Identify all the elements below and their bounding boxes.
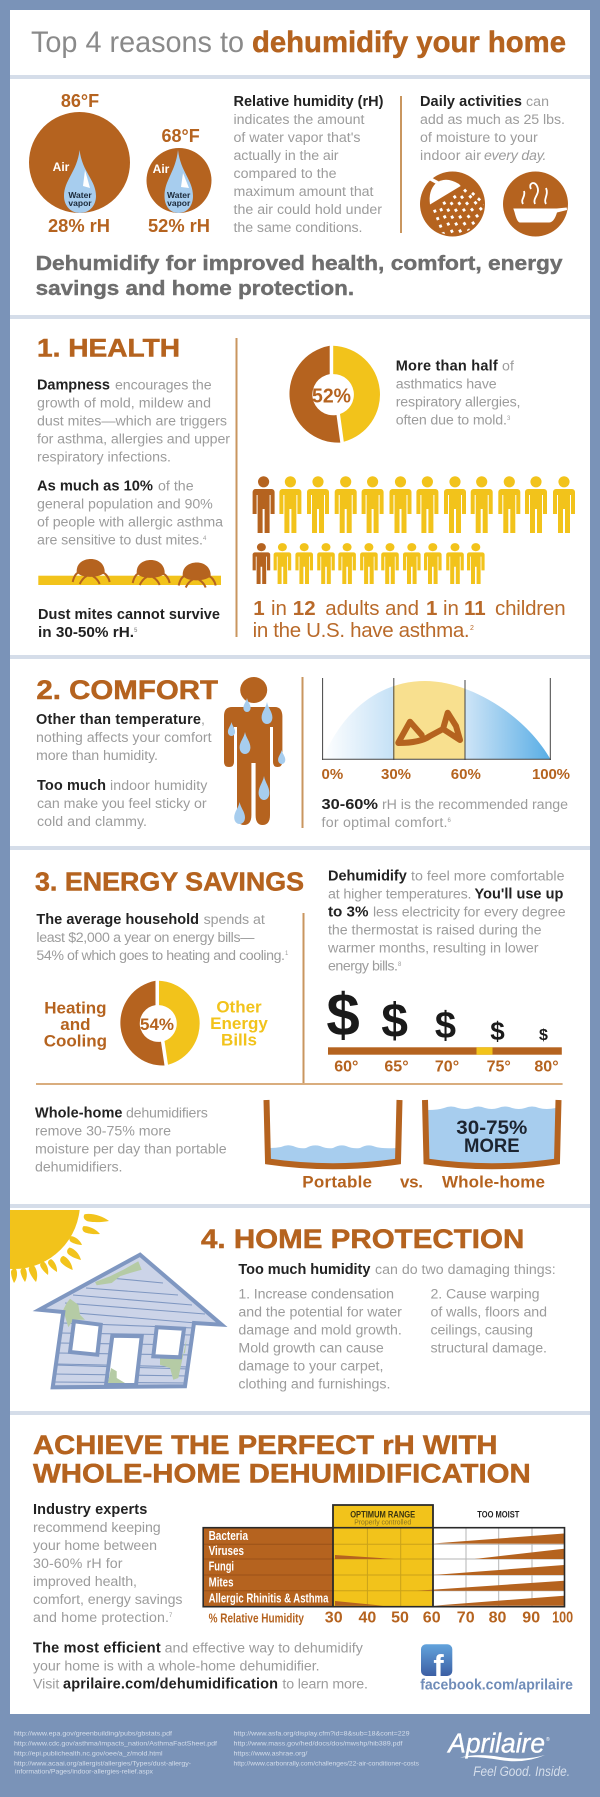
- text: recommended comfort range: 6: [448, 818, 452, 824]
- text: industry experts: improved health,: [33, 1574, 137, 1590]
- text: asthma statistic: 1: [253, 597, 265, 620]
- text: other than temperature: ,: [201, 712, 205, 728]
- donut chart: 54 percent: Bills: [221, 1031, 257, 1050]
- chart: humidity comfort curve: 30%: [381, 766, 411, 783]
- heading: 1. health: 1. HEALTH: [37, 335, 180, 363]
- text: whole-home dehumidifiers: Whole-home: [35, 1106, 122, 1122]
- text: sensitivity to dust mites: of the: [158, 479, 194, 495]
- chart: optimum humidity range table: Mites: [209, 1575, 234, 1590]
- text: damage item 2: 2. Cause warping: [430, 1286, 540, 1302]
- chart: optimum humidity range table: Viruses: [209, 1543, 244, 1558]
- text: other than temperature: more than humidity.: [36, 748, 158, 764]
- text: whole-home dehumidifiers: dehumidifiers.: [35, 1160, 122, 1176]
- text: dehumidify for electricity savings: You'll use up: [474, 887, 563, 903]
- text: asthma statistic: in: [271, 597, 287, 620]
- text: asthma statistic: 2: [470, 625, 474, 632]
- text: industry experts: comfort, energy savings: [33, 1592, 182, 1608]
- text: damage item 1: damage and mold growth.: [238, 1322, 402, 1338]
- text: damage item 2: of walls, floors and: [430, 1304, 547, 1320]
- chart: optimum humidity range table: 100: [552, 1610, 573, 1627]
- text: daily activities: [420, 94, 565, 164]
- text: most efficient call to action: aprilaire.com/dehumidification: [63, 1677, 278, 1693]
- illustration: sun: [10, 1210, 109, 1283]
- text: dehumidify for electricity savings: 8: [398, 962, 402, 968]
- text: sensitivity to dust mites: are sensitive to dust mites.: [37, 533, 203, 549]
- text: dehumidify for electricity savings: [327, 869, 566, 975]
- text: dampness: Dampness: [37, 377, 110, 393]
- icon: sweating person: [224, 677, 285, 825]
- text: recommended comfort range: rH is the recommended range: [382, 797, 568, 813]
- text: industry experts: your home between: [33, 1538, 157, 1554]
- illustration: dust mites: [38, 559, 221, 588]
- chart: humidity comfort curve: 100%: [532, 766, 570, 783]
- text: dust mites cannot survive: Dust mites cannot survive: [38, 607, 220, 623]
- text: industry experts: 30-60% rH for: [33, 1556, 123, 1572]
- text: damage item 1: clothing and furnishings.: [238, 1376, 390, 1392]
- title: Top 4 reasons to: [31, 26, 244, 59]
- text: average household: The average household: [36, 912, 199, 928]
- chart: cost by thermostat temperature: $: [490, 1016, 505, 1046]
- footnotes: right column: [234, 1731, 420, 1768]
- donut chart: 54 percent: 54%: [140, 1015, 174, 1034]
- text: average household: spends at: [204, 912, 265, 928]
- text: relative humidity definition: of water vapor that's: [234, 130, 360, 146]
- text: asthma statistic: 12: [293, 597, 316, 620]
- illustration: portable vs whole-home tanks: 30-75%: [456, 1118, 527, 1139]
- text: dampness: [37, 377, 230, 465]
- diagram: 68F air and water vapor: [146, 126, 212, 236]
- text: daily activities: Daily activities: [420, 94, 522, 110]
- diagram: 86F air and water vapor: 86°F: [61, 91, 99, 111]
- footnotes: right column: http://www.mass.gov/hed/docs/dos/mwshp/hib389.pdf: [234, 1741, 403, 1748]
- illustration: portable vs whole-home tanks: Portable: [302, 1172, 372, 1191]
- chart: optimum humidity range table: 50: [391, 1610, 409, 1627]
- text: damage item 2: [430, 1286, 547, 1356]
- text: other than temperature: Other than temperature: [36, 712, 201, 728]
- text: most efficient call to action: The most efficient: [33, 1641, 161, 1657]
- heading: achieve the perfect rH: WHOLE-HOME DEHUMIDIFICATION: [33, 1459, 531, 1489]
- text: dehumidify for electricity savings: at higher temperatures.: [328, 887, 472, 903]
- illustration: damaged house: [39, 1255, 222, 1387]
- text: dehumidify for electricity savings: less electricity for every degree: [373, 905, 566, 921]
- logo: Aprilaire: Feel Good. Inside.: [473, 1764, 570, 1779]
- text: whole-home dehumidifiers: [35, 1106, 227, 1176]
- text: daily activities: indoor air: [420, 148, 481, 164]
- chart: optimum humidity range table: % Relative Humidity: [209, 1611, 305, 1626]
- text: average household: 54% of which goes to heating and cooling.: [36, 948, 285, 964]
- footnotes: left column: [14, 1731, 217, 1775]
- chart: optimum humidity range table: 80: [489, 1610, 506, 1627]
- diagram: 68F air and water vapor: 68°F: [161, 126, 200, 146]
- diagram: 86F air and water vapor: Air: [53, 160, 70, 174]
- text: damage item 1: damage to your carpet,: [238, 1358, 383, 1374]
- chart: optimum humidity range table: 70: [457, 1610, 475, 1627]
- chart: cost by thermostat temperature: $: [539, 1027, 548, 1044]
- text: industry experts: and home protection.: [33, 1610, 169, 1626]
- text: whole-home dehumidifiers: remove 30-75% more: [35, 1124, 171, 1140]
- text: relative humidity definition: [234, 94, 384, 236]
- text: dampness: respiratory infections.: [37, 449, 171, 465]
- donut chart: 54 percent: Heating: [44, 998, 107, 1017]
- footnotes: right column: http://www.asfa.org/display.cfm?id=8&sub=18&cont=229: [234, 1731, 410, 1738]
- chart: optimum humidity range table: Properly controlled: [354, 1520, 411, 1526]
- footnotes: left column: information/Pages/indoor-allergies-relief.aspx: [15, 1768, 154, 1775]
- donut chart: 54 percent: Other: [216, 998, 262, 1017]
- text: recommended comfort range: for optimal comfort.: [322, 815, 448, 831]
- chart: cost by thermostat temperature: 65°: [384, 1059, 409, 1076]
- logo: Aprilaire: Aprilaire: [446, 1727, 545, 1758]
- chart: cost by thermostat temperature: $: [381, 995, 408, 1048]
- heading: achieve the perfect rH: ACHIEVE THE PERFECT rH WITH: [33, 1430, 498, 1460]
- donut chart: 52 percent: [289, 346, 380, 443]
- chart: optimum humidity range table: Allergic Rhinitis & Asthma: [209, 1591, 329, 1606]
- text: asthma statistic: adults and: [325, 597, 419, 620]
- text: average household: least $2,000 a year on energy bills—: [36, 930, 255, 946]
- text: relative humidity definition: maximum amount that: [234, 184, 374, 200]
- text: too much humidity: can make you feel sticky or: [37, 796, 207, 812]
- text: asthma statistic: in: [443, 597, 459, 620]
- chart: optimum humidity range table: TOO MOIST: [477, 1509, 519, 1520]
- logo: Aprilaire: [446, 1727, 570, 1779]
- text: industry experts: Industry experts: [33, 1502, 147, 1518]
- text: sensitivity to dust mites: of people with allergic asthma: [37, 515, 223, 531]
- footnotes: right column: https://www.ashrae.org/: [234, 1751, 308, 1758]
- text: dampness: growth of mold, mildew and: [37, 395, 211, 411]
- footnotes: left column: http://www.cdc.gov/asthma/impacts_nation/AsthmaFactSheet.pdf: [14, 1741, 217, 1748]
- icon: facebook: facebook.com/aprilaire: [420, 1676, 573, 1693]
- text: industry experts: recommend keeping: [33, 1520, 161, 1536]
- text: daily activities: can: [526, 94, 549, 110]
- donut chart: 54 percent: and: [60, 1015, 91, 1034]
- text: more than half of asthmatics: asthmatics have: [396, 377, 497, 393]
- heading: 3. energy savings: 3. ENERGY SAVINGS: [35, 867, 304, 897]
- chart: humidity comfort curve: [322, 678, 570, 783]
- pictogram: 1 in 11 children: [253, 543, 485, 584]
- chart: cost by thermostat temperature: [326, 982, 562, 1076]
- text: daily activities: of moisture to your: [420, 130, 538, 146]
- text: relative humidity definition: actually in the air: [234, 148, 339, 164]
- text: dust mites cannot survive: 5: [134, 628, 138, 634]
- text: most efficient call to action: [33, 1641, 368, 1693]
- donut chart: 52 percent: 52%: [312, 386, 351, 408]
- text: industry experts: [33, 1502, 182, 1626]
- subheading: dehumidify for improved: Dehumidify for improved health, comfort, energy: [36, 253, 564, 275]
- text: sensitivity to dust mites: As much as 10%: [37, 479, 153, 495]
- chart: optimum humidity range table: Fungi: [209, 1559, 234, 1574]
- text: average household: [36, 912, 289, 964]
- text: damage item 1: and the potential for water: [238, 1304, 402, 1320]
- text: dehumidify for electricity savings: warmer months, resulting in lower: [327, 941, 539, 957]
- text: damage item 2: structural damage.: [430, 1340, 547, 1356]
- chart: cost by thermostat temperature: $: [435, 1005, 456, 1047]
- donut chart: 54 percent: Cooling: [44, 1032, 107, 1051]
- donut chart: 54 percent: Energy: [210, 1014, 268, 1033]
- text: damage item 1: Mold growth can cause: [238, 1340, 384, 1356]
- text: too much humidity: indoor humidity: [110, 778, 208, 794]
- diagram: 68F air and water vapor: Water: [167, 190, 191, 200]
- illustration: portable vs whole-home tanks: Whole-home: [442, 1172, 545, 1191]
- text: more than half of asthmatics: often due to mold.: [396, 413, 507, 429]
- chart: optimum humidity range table: OPTIMUM RANGE: [350, 1509, 415, 1520]
- footnotes: left column: http://www.acaai.org/allergist/allergies/Types/dust-allergy-: [14, 1761, 191, 1768]
- footnotes: left column: http://www.epa.gov/greenbuilding/pubs/gbstats.pdf: [14, 1731, 172, 1738]
- pictogram: 1 in 12 adults: [253, 476, 575, 533]
- text: daily activities: add as much as 25 lbs.: [420, 112, 565, 128]
- text: damage item 2: ceilings, causing: [430, 1322, 533, 1338]
- diagram: 68F air and water vapor: Air: [153, 162, 170, 176]
- text: too much humidity intro: [238, 1262, 556, 1278]
- diagram: 68F air and water vapor: vapor: [167, 198, 191, 208]
- subheading: dehumidify for improved: [36, 253, 564, 300]
- text: most efficient call to action: your home is with a whole-home dehumidifier.: [33, 1659, 320, 1675]
- chart: humidity comfort curve: 60%: [451, 766, 481, 783]
- chart: cost by thermostat temperature: 70°: [435, 1059, 459, 1076]
- icon: facebook: f: [433, 1648, 444, 1683]
- icon: steaming pan: [503, 172, 568, 236]
- text: too much humidity intro: can do two damaging things:: [375, 1262, 556, 1278]
- text: relative humidity definition: compared to the: [234, 166, 337, 182]
- text: dehumidify for electricity savings: to feel more comfortable: [411, 869, 565, 885]
- text: too much humidity: cold and clammy.: [37, 814, 147, 830]
- icon: shower: [420, 172, 485, 236]
- text: most efficient call to action: and effective way to dehumidify: [165, 1641, 364, 1657]
- text: more than half of asthmatics: 3: [507, 416, 511, 422]
- donut chart: 54 percent: [44, 981, 268, 1066]
- text: dampness: encourages the: [115, 377, 212, 393]
- chart: optimum humidity range table: 90: [522, 1610, 540, 1627]
- illustration: portable vs whole-home tanks: [266, 1100, 558, 1191]
- diagram: 86F air and water vapor: Water: [68, 190, 92, 200]
- text: industry experts: 7: [169, 1613, 173, 1619]
- text: dehumidify for electricity savings: to 3%: [328, 905, 369, 921]
- text: dehumidify for electricity savings: Dehumidify: [328, 869, 407, 885]
- chart: optimum humidity range table: 30: [325, 1610, 343, 1627]
- text: dampness: dust mites—which are triggers: [37, 413, 227, 429]
- diagram: 86F air and water vapor: vapor: [68, 198, 92, 208]
- text: asthma statistic: 1: [426, 597, 437, 620]
- text: dust mites cannot survive: [38, 607, 220, 641]
- footnotes: left column: http://epi.publichealth.nc.gov/oee/a_z/mold.html: [14, 1751, 163, 1758]
- title: [31, 26, 566, 59]
- text: sensitivity to dust mites: general population and 90%: [37, 497, 213, 513]
- text: asthma statistic: 11: [464, 597, 486, 620]
- icon: facebook: [420, 1644, 573, 1693]
- text: other than temperature: nothing affects your comfort: [36, 730, 212, 746]
- chart: cost by thermostat temperature: 60°: [334, 1059, 358, 1076]
- chart: optimum humidity range table: 40: [359, 1610, 376, 1627]
- text: recommended comfort range: [322, 797, 568, 831]
- text: asthma statistic: [253, 597, 566, 642]
- text: dehumidify for electricity savings: energy bills.: [328, 959, 398, 975]
- text: dehumidify for electricity savings: the thermostat is raised during the: [328, 923, 542, 939]
- text: sensitivity to dust mites: [37, 479, 223, 549]
- text: more than half of asthmatics: More than half: [396, 359, 498, 375]
- illustration: portable vs whole-home tanks: vs.: [400, 1172, 423, 1191]
- chart: optimum humidity range table: 60: [423, 1610, 441, 1627]
- subheading: dehumidify for improved: savings and home protection.: [36, 278, 354, 300]
- text: relative humidity definition: the same conditions.: [234, 220, 362, 236]
- text: too much humidity: Too much: [37, 778, 106, 794]
- text: average household: 1: [285, 951, 289, 957]
- text: daily activities: every day.: [484, 148, 546, 164]
- text: damage item 1: 1. Increase condensation: [238, 1286, 394, 1302]
- heading: 2. comfort: 2. COMFORT: [36, 675, 219, 705]
- text: more than half of asthmatics: respiratory allergies,: [396, 395, 520, 411]
- chart: optimum humidity range table: [203, 1505, 573, 1627]
- footnotes: right column: http://www.carbonrally.com/challenges/22-air-conditioner-costs: [234, 1761, 420, 1768]
- text: whole-home dehumidifiers: moisture per day than portable: [35, 1142, 227, 1158]
- diagram: 86F air and water vapor: 28% rH: [48, 216, 110, 236]
- text: relative humidity definition: Relative humidity (rH): [234, 94, 384, 110]
- logo: Aprilaire: ®: [546, 1736, 550, 1743]
- text: more than half of asthmatics: [396, 359, 520, 429]
- text: whole-home dehumidifiers: dehumidifiers: [126, 1106, 208, 1122]
- chart: humidity comfort curve: 0%: [322, 766, 343, 783]
- text: too much humidity: [37, 778, 208, 830]
- text: more than half of asthmatics: of: [502, 359, 514, 375]
- title: dehumidify your home: [252, 26, 566, 59]
- illustration: portable vs whole-home tanks: MORE: [464, 1136, 520, 1157]
- diagram: 68F air and water vapor: 52% rH: [148, 216, 210, 236]
- text: dampness: for asthma, allergies and upper: [37, 431, 230, 447]
- text: recommended comfort range: 30-60%: [322, 797, 378, 813]
- text: asthma statistic: in the U.S. have asthma.: [253, 619, 470, 642]
- text: damage item 1: [238, 1286, 402, 1392]
- text: asthma statistic: children: [495, 597, 566, 620]
- chart: cost by thermostat temperature: 80°: [534, 1059, 559, 1076]
- text: too much humidity intro: Too much humidity: [238, 1262, 370, 1278]
- text: sensitivity to dust mites: 4: [203, 536, 207, 542]
- chart: optimum humidity range table: Bacteria: [209, 1528, 249, 1543]
- text: relative humidity definition: indicates the amount: [234, 112, 365, 128]
- text: other than temperature: [36, 712, 212, 764]
- heading: 4. home protection: 4. HOME PROTECTION: [201, 1224, 524, 1254]
- chart: cost by thermostat temperature: 75°: [487, 1059, 511, 1076]
- chart: cost by thermostat temperature: $: [326, 982, 360, 1048]
- text: dust mites cannot survive: in 30-50% rH.: [38, 625, 134, 641]
- text: relative humidity definition: the air could hold under: [234, 202, 382, 218]
- text: most efficient call to action: to learn more.: [282, 1677, 368, 1693]
- diagram: 86F air and water vapor: [29, 91, 130, 236]
- heading: achieve the perfect rH: [33, 1430, 531, 1489]
- text: most efficient call to action: Visit: [33, 1677, 59, 1693]
